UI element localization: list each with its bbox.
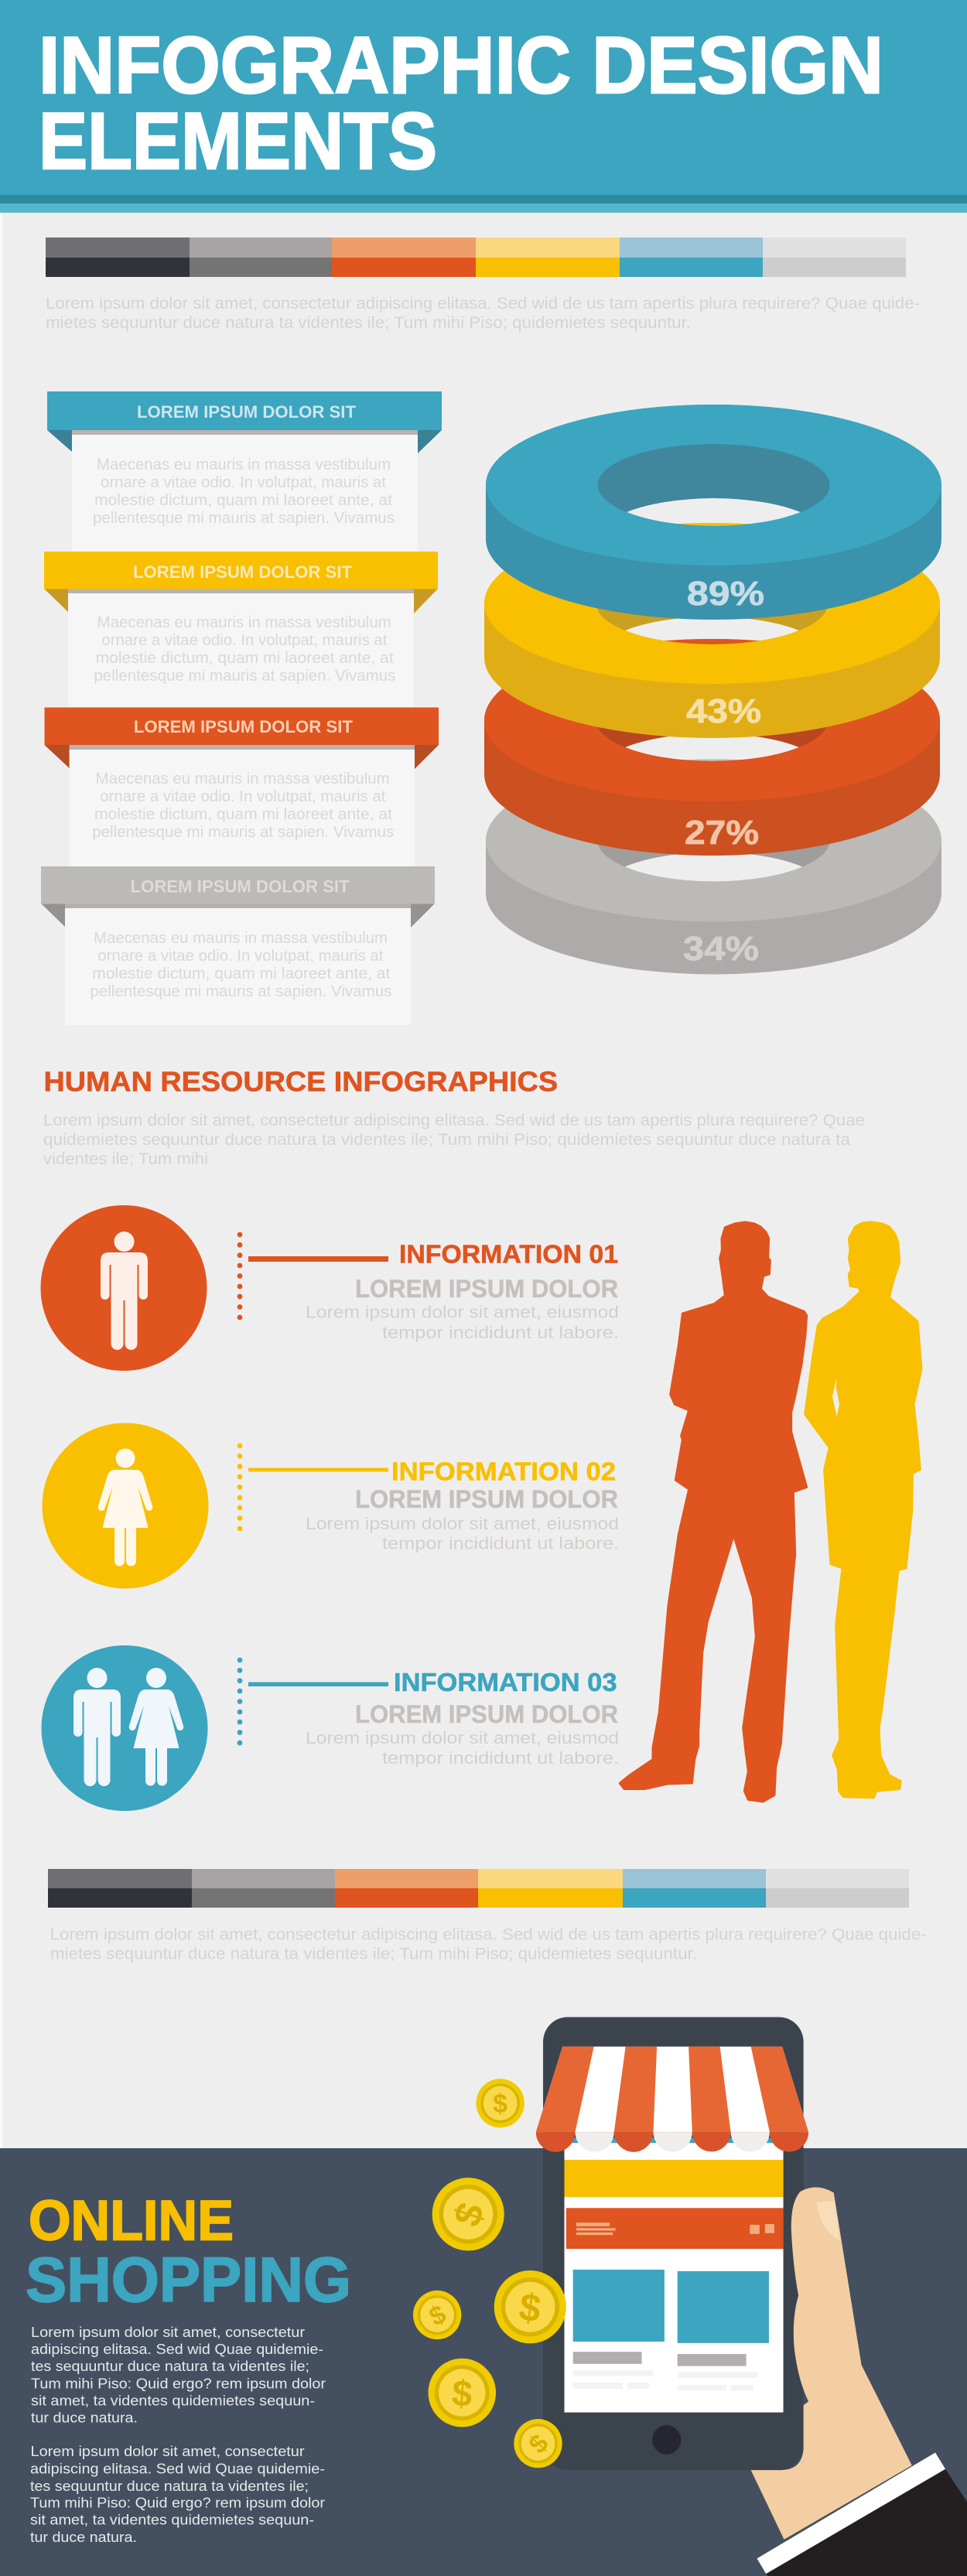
hand [751,2187,912,2540]
ribbon card 1: blue: molestie dictum, quam mi laoreet ante, at [94,492,392,509]
ribbon card 2: yellow: LOREM IPSUM DOLOR SIT [133,562,353,582]
ribbon card 1: blue: pellentesque mi mauris at sapien. Vivamus [93,510,395,527]
ribbon card 4: grey: Maecenas eu mauris in massa vestibulum [94,930,388,947]
shop awning [536,2047,808,2152]
information 03: INFORMATION 03 [394,1668,617,1696]
home button [652,2425,681,2455]
colour swatch bar: bottom [48,1869,909,1908]
coin [476,2079,525,2127]
sleeve and cuff [757,2452,967,2576]
information 01 [237,1232,619,1342]
information 03 [237,1658,619,1768]
ribbon card 4: grey: LOREM IPSUM DOLOR SIT [131,877,350,896]
online shopping paragraph 2: sit amet, ta videntes quidemietes sequun- [30,2513,314,2528]
coin [429,2359,496,2427]
ribbon card 1: blue: Maecenas eu mauris in massa vestibulum [97,456,391,473]
human resource text [43,1112,865,1168]
coin: $ [517,2284,544,2331]
ribbon card 3: orange: pellentesque mi mauris at sapien. Vivamus [92,824,394,841]
ring: yellow 43% [484,523,940,738]
ribbon card 4: grey: ornare a vitae odio. In volutpat, mauris at [97,948,384,965]
ring: blue 89% [486,405,941,620]
silhouette: man [620,1222,807,1802]
icon: man in orange circle [40,1205,207,1371]
lower text: Lorem ipsum dolor sit amet, consectetur adipiscing elitasa. Sed wid de us tam apertis plura requirere? Quae quide- [50,1926,927,1944]
coin: $ [425,2299,451,2332]
ring: orange 27% [484,639,940,856]
coin: $ [451,2373,473,2414]
heading: online shopping: SHOPPING [26,2245,351,2315]
illustration: tablet shop in hand with coins [413,2017,967,2576]
ribbon card 4: grey: pellentesque mi mauris at sapien. Vivamus [90,983,391,1000]
online shopping paragraph 2: tes sequuntur duce natura ta videntes ile; [30,2479,309,2494]
information 03: Lorem ipsum dolor sit amet, eiusmod [306,1728,619,1748]
coin: $ [493,2089,507,2119]
coin: $ [523,2428,555,2459]
ribbon card 3: orange: LOREM IPSUM DOLOR SIT [134,717,353,736]
ribbon card 1: blue: LOREM IPSUM DOLOR SIT [137,402,357,422]
information 01: LOREM IPSUM DOLOR [355,1275,618,1303]
ring: blue 89%: 89% [687,575,764,613]
human resource heading: HUMAN RESOURCE INFOGRAPHICS [43,1066,558,1097]
online shopping paragraph 2: tur duce natura. [30,2530,137,2545]
ribbon card 2: yellow [44,552,438,708]
information 02: LOREM IPSUM DOLOR [355,1485,618,1513]
title: INFOGRAPHIC DESIGN [39,21,883,111]
information 02: INFORMATION 02 [391,1457,616,1486]
coin [514,2419,562,2468]
ribbon card 2: yellow: Maecenas eu mauris in massa vestibulum [97,614,391,631]
ring: orange 27%: 27% [685,814,759,852]
ribbon card 4: grey [41,866,435,1025]
tablet screen [564,2138,784,2413]
human resource text: Lorem ipsum dolor sit amet, consectetur adipiscing elitasa. Sed wid de us tam apertis plura requirere? Quae [43,1112,865,1129]
online shopping paragraph 1: Lorem ipsum dolor sit amet, consectetur [31,2325,305,2340]
information 02: Lorem ipsum dolor sit amet, eiusmod [306,1514,619,1533]
human resource text: videntes ile; Tum mihi [43,1150,208,1168]
silhouette: woman [805,1222,922,1798]
information 03: LOREM IPSUM DOLOR [355,1700,618,1728]
information 02 [237,1443,619,1553]
ribbon card 3: orange: molestie dictum, quam mi laoreet ante, at [94,806,392,823]
ribbon card 2: yellow: molestie dictum, quam mi laoreet ante, at [96,650,394,667]
ribbon card 3: orange [45,707,439,866]
header banner [0,0,967,213]
online shopping paragraph 1: tes sequuntur duce natura ta videntes ile; [31,2359,309,2374]
ring: yellow 43%: 43% [686,692,761,730]
online shopping paragraph 2: adipiscing elitasa. Sed wid Quae quidemie- [30,2462,325,2477]
colour swatch bar: top [46,237,906,277]
ribbon card 3: orange: ornare a vitae odio. In volutpat, mauris at [100,788,386,805]
ribbon card 1: blue: ornare a vitae odio. In volutpat, mauris at [101,474,386,491]
online shopping paragraph 1: sit amet, ta videntes quidemietes sequun- [31,2393,315,2409]
ribbon card 1: blue [47,391,442,552]
information 03: tempor incididunt ut labore. [382,1748,619,1768]
human resource text: quidemietes sequuntur duce natura ta videntes ile; Tum mihi Piso; quidemietes sequuntur duce natura ta [43,1131,850,1149]
title [39,21,883,186]
ribbon card 3: orange: Maecenas eu mauris in massa vestibulum [96,770,390,787]
online shopping paragraph 2 [30,2444,325,2545]
ring: grey 34%: 34% [683,930,759,968]
icon: woman in yellow circle [42,1423,209,1589]
heading: online shopping [26,2190,351,2315]
online shopping paragraph 1: adipiscing elitasa. Sed wid Quae quidemie- [31,2342,323,2357]
lower text [50,1926,927,1963]
ribbon card 2: yellow: pellentesque mi mauris at sapien. Vivamus [94,668,395,685]
information 01: INFORMATION 01 [399,1239,618,1269]
stacked ring chart [484,405,941,974]
tablet body [543,2017,804,2470]
intro text: mietes sequuntur duce natura ta videntes ile; Tum mihi Piso; quidemietes sequuntur. [46,314,691,332]
lower text: mietes sequuntur duce natura ta videntes ile; Tum mihi Piso; quidemietes sequuntur. [50,1946,697,1963]
information 01: Lorem ipsum dolor sit amet, eiusmod [306,1303,619,1321]
panel: online shopping [0,2148,967,2576]
coin: $ [445,2198,493,2232]
online shopping paragraph 1: tur duce natura. [31,2410,138,2425]
online shopping paragraph 2: Lorem ipsum dolor sit amet, consectetur [31,2444,305,2459]
ribbon card 4: grey: molestie dictum, quam mi laoreet ante, at [92,965,391,982]
coin [432,2178,504,2250]
icon: couple in blue circle [42,1645,207,1811]
title: ELEMENTS [39,97,437,186]
ring: grey 34% [486,759,941,974]
online shopping paragraph 1 [31,2325,326,2425]
coin [494,2270,566,2343]
coin [413,2291,461,2339]
ribbon card 2: yellow: ornare a vitae odio. In volutpat, mauris at [101,632,388,649]
online shopping paragraph 2: Tum mihi Piso: Quid ergo? rem ipsum dolor [30,2495,325,2510]
online shopping paragraph 1: Tum mihi Piso: Quid ergo? rem ipsum dolor [31,2376,326,2392]
heading: online shopping: ONLINE [29,2190,234,2253]
intro text: Lorem ipsum dolor sit amet, consectetur adipiscing elitasa. Sed wid de us tam apertis plura requirere? Quae quide- [46,295,920,313]
intro text [46,295,920,332]
information 02: tempor incididunt ut labore. [382,1533,619,1553]
information 01: tempor incididunt ut labore. [382,1323,619,1342]
